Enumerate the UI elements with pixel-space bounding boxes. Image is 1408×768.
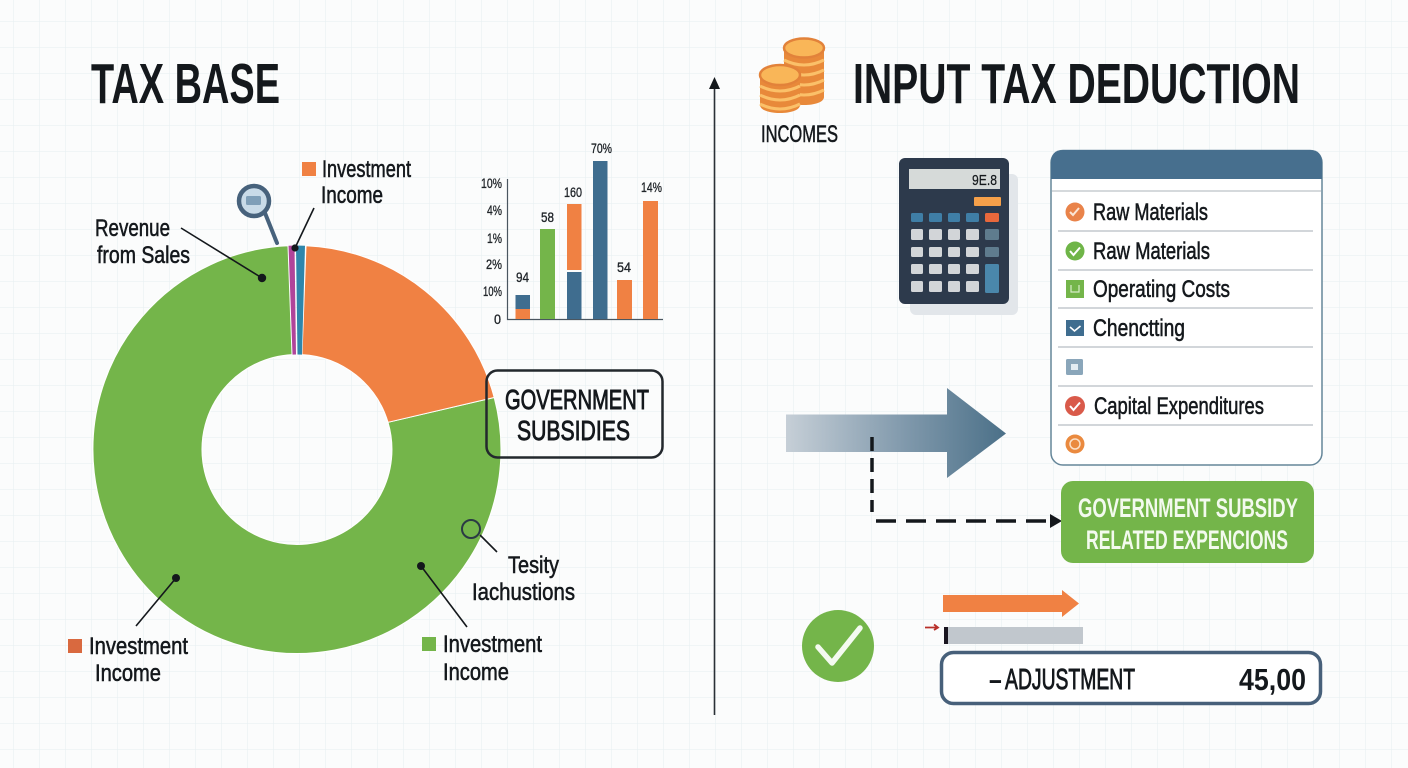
callout: government subsidies: SUBSIDIES	[517, 415, 630, 446]
bar chart	[481, 140, 663, 327]
y axis labels: 0	[494, 311, 501, 327]
big arrow	[786, 388, 1006, 478]
segment: green revenue	[93, 246, 501, 654]
value labels	[516, 140, 662, 285]
row: operating costs	[1066, 276, 1230, 303]
value labels: 58	[541, 209, 554, 225]
label: revenue from sales: from Sales	[97, 242, 190, 269]
y axis labels: 4%	[487, 202, 502, 218]
segment: purple	[288, 246, 296, 355]
panel: expense checklist	[1051, 150, 1322, 465]
row: raw materials 2: Raw Materials	[1093, 238, 1210, 265]
row: chenctting	[1066, 315, 1185, 342]
row: capital expenditures: Capital Expenditures	[1094, 393, 1264, 420]
callout: government subsidy related expenses: GOVERNMENT SUBSIDY	[1078, 493, 1298, 523]
label: investment income top: Income	[321, 182, 383, 209]
icon: magnifier	[239, 186, 277, 243]
y axis labels: 2%	[486, 256, 502, 272]
y axis labels: 10%	[481, 175, 502, 191]
label: investment income bottom left	[68, 574, 188, 687]
row: raw materials 2	[1066, 238, 1210, 265]
icon: calculator	[899, 158, 1018, 315]
dashed connector arrow	[872, 437, 1062, 528]
label: tesity lachustions: Tesity	[508, 552, 559, 579]
axes	[508, 179, 663, 320]
label: revenue from sales: Revenue	[95, 215, 170, 242]
adjustment box	[942, 652, 1320, 704]
callout: government subsidy related expenses: RELATED EXPENCIONS	[1086, 525, 1288, 555]
label: investment income bottom right: Income	[443, 659, 509, 686]
label: investment income bottom left: Investment	[89, 633, 188, 660]
icon: calculator: 9E.8	[972, 172, 997, 189]
row: orange icon	[1066, 434, 1084, 454]
donut chart	[93, 246, 501, 654]
label: investment income top	[291, 156, 411, 252]
row: blank icon	[1066, 359, 1083, 375]
small red arrow	[925, 624, 938, 630]
segment: orange	[302, 246, 494, 422]
label: tesity lachustions	[462, 520, 575, 606]
callout: government subsidies: GOVERNMENT	[505, 384, 649, 415]
gray progress bar	[944, 627, 1083, 644]
label: incomes: INCOMES	[761, 121, 838, 148]
y axis labels: 10%	[483, 283, 502, 299]
icon: check circle	[802, 610, 874, 682]
row: capital expenditures	[1065, 393, 1264, 420]
value labels: 54	[617, 259, 631, 275]
label: investment income bottom left: Income	[95, 660, 161, 687]
label: revenue from sales	[95, 215, 266, 282]
y axis labels: 1%	[487, 230, 502, 246]
bars	[516, 161, 658, 319]
value labels: 94	[516, 269, 529, 285]
label: tesity lachustions: Iachustions	[472, 579, 575, 606]
back stack	[784, 38, 824, 105]
label: investment income top: Investment	[322, 156, 411, 183]
label: investment income bottom right: Investment	[443, 631, 542, 658]
panel header	[1051, 150, 1322, 179]
title: tax base: TAX BASE	[91, 52, 280, 116]
y axis labels	[481, 175, 502, 327]
icon: coin stacks	[760, 38, 824, 113]
front stack	[760, 65, 800, 113]
value labels: 160	[564, 184, 582, 200]
adjustment box: 45,00	[1239, 662, 1306, 697]
row: raw materials 1: Raw Materials	[1093, 199, 1208, 226]
row: operating costs: Operating Costs	[1093, 276, 1230, 303]
row: chenctting: Chenctting	[1093, 315, 1185, 342]
value labels: 14%	[641, 179, 662, 195]
callout: government subsidy related expenses	[1061, 481, 1314, 563]
value labels: 70%	[591, 140, 612, 156]
segment: blue	[296, 246, 305, 355]
row: raw materials 1	[1066, 199, 1208, 226]
divider arrow	[709, 77, 720, 715]
orange arrow	[943, 590, 1079, 617]
adjustment box: – ADJUSTMENT	[990, 664, 1135, 696]
label: investment income bottom right	[417, 562, 542, 686]
callout: government subsidies	[486, 370, 662, 458]
